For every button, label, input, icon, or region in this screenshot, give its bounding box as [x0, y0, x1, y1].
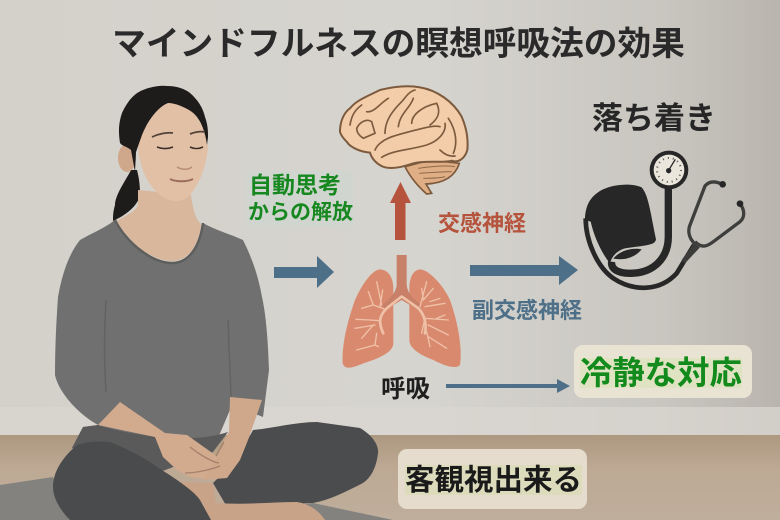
- callout: objective view: 客観視出来る: [405, 464, 582, 497]
- icon: lungs: [343, 255, 461, 368]
- closed eyes, nose, mouth: [152, 132, 205, 181]
- foot and ankle: [180, 482, 325, 520]
- arrow: to blood pressure gauge: [470, 256, 578, 285]
- hair: [119, 86, 208, 172]
- icon: brain: [340, 86, 468, 194]
- ponytail: [113, 170, 140, 221]
- ear: [118, 144, 136, 172]
- arms skin and hands: [98, 402, 220, 480]
- arrow: up, sympathetic nerve: [390, 182, 411, 240]
- arrow: breathing to calm response: [446, 379, 570, 393]
- icon: blood pressure cuff and stethoscope: [585, 151, 744, 288]
- callout: objective view: [398, 449, 587, 509]
- label: breathing: 呼吸: [381, 375, 430, 403]
- person meditating: [53, 86, 378, 520]
- arrow: to lungs: [274, 256, 334, 288]
- title: マインドフルネスの瞑想呼吸法の効果: [112, 25, 685, 63]
- callout: calm response: 冷静な対応: [580, 355, 742, 391]
- shirt collar: [115, 220, 203, 263]
- label: automatic thought release: [247, 171, 353, 227]
- label: sympathetic nerve: 交感神経: [438, 211, 526, 236]
- label: automatic thought release: からの解放: [248, 201, 353, 224]
- left leg: [53, 441, 211, 520]
- face: [138, 103, 208, 201]
- right leg: [213, 422, 378, 507]
- label: calm: 落ち着き: [592, 101, 716, 136]
- label: automatic thought release: 自動思考: [249, 172, 341, 198]
- shirt torso and arms: [55, 220, 269, 470]
- label: parasympathetic nerve: 副交感神経: [472, 298, 582, 323]
- neck and chest: [117, 190, 201, 261]
- callout: calm response: [574, 345, 752, 398]
